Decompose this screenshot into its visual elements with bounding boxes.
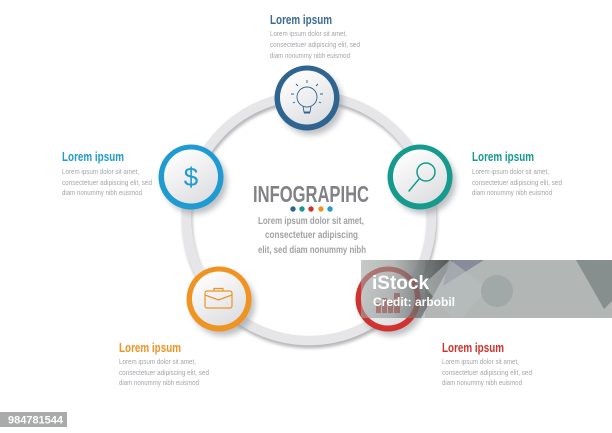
text block: right: Lorem ipsum — [472, 149, 534, 164]
text block: top: diam nonummy nibh euismod — [270, 51, 350, 60]
center text: Lorem ipsum dolor sit amet, — [258, 215, 364, 227]
stock id tag: 984781544 — [8, 414, 64, 426]
watermark banner: Credit: arbobil — [373, 295, 455, 309]
text block: right — [472, 149, 562, 197]
icon: light bulb — [291, 80, 323, 113]
text block: bottom-right: consectetuer adipiscing elit, sed — [442, 368, 532, 377]
text block: bottom-left: consectetuer adipiscing elit, sed — [119, 368, 209, 377]
node: left blue — [158, 144, 227, 214]
text block: top: Lorem ipsum — [270, 12, 332, 27]
text block: bottom-right: Lorem ipsum — [442, 340, 504, 355]
text block: left: consectetuer adipiscing elit, sed — [62, 178, 152, 187]
watermark banner — [361, 260, 612, 318]
text block: top: Lorem ipsum dolor sit amet, — [270, 29, 347, 38]
node: bottom-right red — [356, 266, 424, 336]
text block: bottom-left: Lorem ipsum dolor sit amet, — [119, 357, 196, 366]
node: right teal — [388, 144, 456, 214]
text block: bottom-left: diam nonummy nibh euismod — [119, 378, 199, 387]
text block: bottom-left — [119, 340, 209, 387]
text block: bottom-right: diam nonummy nibh euismod — [442, 378, 522, 387]
node: top blue — [274, 66, 343, 135]
node: bottom-left orange — [186, 266, 255, 336]
text block: right: diam nonummy nibh euismod — [472, 188, 552, 197]
icon: magnifier — [409, 163, 435, 191]
stock id tag — [0, 412, 67, 427]
icon: bar chart — [376, 293, 400, 313]
icon: briefcase — [205, 288, 232, 308]
center dots — [290, 206, 333, 212]
center text — [258, 215, 366, 256]
text block: top: consectetuer adipiscing elit, sed — [270, 40, 360, 49]
text block: right: Lorem ipsum dolor sit amet, — [472, 167, 549, 176]
center text: elit, sed diam nonummy nibh — [258, 244, 366, 256]
icon: dollar sign: $ — [184, 162, 199, 192]
text block: top — [270, 12, 360, 60]
central ring — [186, 96, 432, 344]
text block: left — [62, 149, 152, 197]
text block: bottom-right: Lorem ipsum dolor sit amet, — [442, 357, 519, 366]
center title: INFOGRAPIHC — [253, 181, 369, 207]
text block: right: consectetuer adipiscing elit, sed — [472, 178, 562, 187]
text block: left: diam nonummy nibh euismod — [62, 188, 142, 197]
text block: bottom-right — [442, 340, 532, 387]
text block: left: Lorem ipsum — [62, 149, 124, 164]
center text: consectetuer adipiscing — [265, 229, 358, 241]
text block: left: Lorem ipsum dolor sit amet, — [62, 167, 139, 176]
watermark text: iStock — [372, 273, 429, 294]
text block: bottom-left: Lorem ipsum — [119, 340, 181, 355]
